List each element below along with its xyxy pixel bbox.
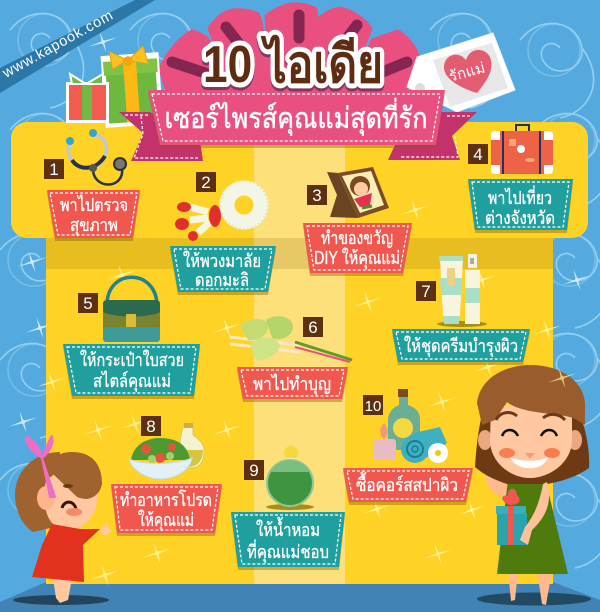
gift: green [102,45,161,126]
bow [161,4,418,100]
icon: lotus and incense [230,316,352,362]
label 2: ดอกมะลิ [195,270,249,290]
label 8: ทำอาหารโปรด [120,489,212,510]
tag text: รักแม่ [447,60,487,85]
label 2 [170,246,276,292]
label 4: ต่างจังหวัด [485,208,555,228]
label 9: ที่คุณแม่ชอบ [247,539,329,563]
item 6 [230,316,352,399]
number 4: 4 [473,145,483,164]
label 4 [468,179,573,230]
number 5: 5 [83,294,93,313]
label 1: สุขภาพ [70,215,118,236]
banner text: เซอร์ไพรส์คุณแม่สุดที่รัก [164,98,428,136]
number 7: 7 [421,282,431,301]
label 1: พาไปตรวจ [60,194,128,215]
label 1 [47,190,140,238]
item 10 [343,389,473,502]
title: 10 ไอเดีย [203,34,383,94]
item 9 [231,446,345,567]
floor [0,582,600,612]
icon: salad and oil [129,423,204,479]
character: mother [475,363,591,606]
icon: garland [175,182,268,241]
number 3: 3 [312,186,322,205]
item 5 [63,277,200,396]
banner [148,90,445,145]
item 4 [468,125,573,230]
item 1 [44,129,140,238]
item 7 [392,254,530,362]
label 6: พาไปทำบุญ [253,373,331,395]
label 8 [111,484,222,533]
icon: suitcase [491,125,553,174]
label 3: ทำของขวัญ [321,228,393,248]
icon: spa set [373,389,448,463]
number 2: 2 [201,173,211,192]
number 1: 1 [49,160,59,179]
gift: red [66,74,109,123]
item 8 [111,416,222,533]
icon: photo frame [327,167,389,218]
number 9: 9 [249,461,259,480]
gift box body [46,130,553,584]
icon: skincare tube and bottle [437,254,487,327]
number 6: 6 [308,318,318,337]
item 3 [303,167,412,273]
title: 10 ไอเดีย [203,34,383,94]
icon: stethoscope [66,129,126,184]
gift box lid [11,122,588,238]
label 5: ให้กระเป๋าใบสวย [80,349,184,370]
label 5: สไตล์คุณแม่ [93,370,171,392]
character: daughter [13,436,111,605]
label 10: ซื้อคอร์สสปาผิว [356,472,458,495]
icon: handbag [103,277,160,342]
label 9 [231,512,345,567]
icon: perfume [266,446,314,510]
label 4: พาไปเที่ยว [488,185,552,208]
label 9: ให้น้ำหอม [256,517,320,540]
label 2: ให้พวงมาลัย [183,250,261,271]
label 5 [63,344,200,396]
ribbon url [0,0,155,93]
number 8: 8 [146,417,156,436]
label 7: ให้ชุดครีมบำรุงผิว [404,335,518,357]
label 3: DIY ให้คุณแม่ [314,247,400,269]
sparkles on box [34,195,565,590]
item 2 [170,172,276,292]
ribbon url: www.kapook.com [0,7,116,82]
label 8: ให้คุณแม่ [138,509,194,531]
label 3 [303,223,412,273]
number 10: 10 [365,398,381,415]
gift tag [407,33,515,112]
banner tails [119,112,477,161]
heart [444,50,491,93]
title: 10 ไอเดีย [203,37,383,97]
